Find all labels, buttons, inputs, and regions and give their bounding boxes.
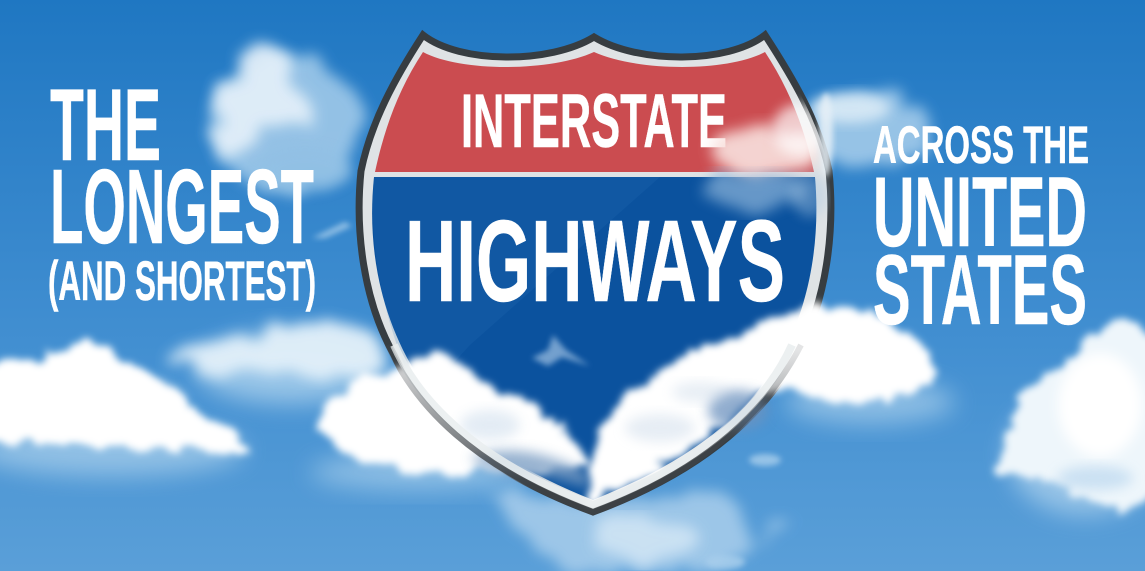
shield red top panel: [375, 52, 814, 172]
shield blue bottom panel: [372, 177, 816, 500]
title left: the longest (and shortest): THE: [50, 68, 161, 182]
shield outer border: [359, 35, 831, 512]
cloud: small wisp inside shield: [532, 335, 590, 366]
cloud: upper left behind text: [210, 46, 360, 238]
cloud: bottom centre: [490, 454, 800, 571]
cloud: over shield upper right: [703, 93, 833, 217]
title right: across the united states: [873, 116, 1089, 345]
cloud: far right: [996, 322, 1145, 515]
interstate shield: [359, 35, 831, 512]
shield rim over clouds: [388, 345, 801, 512]
heading: highways: HIGHWAYS: [405, 196, 785, 326]
shield light reflection: [373, 177, 660, 400]
cloud: foreground right of shield: [583, 304, 955, 505]
title left: the longest (and shortest): (AND SHORTEST): [48, 249, 316, 312]
cloud: foreground left of shield: [310, 345, 592, 490]
cloud: lower left: [0, 338, 252, 476]
title left: the longest (and shortest): LONGEST: [50, 148, 314, 266]
cloud: centre left: [170, 317, 385, 404]
cloud: upper right behind shield: [810, 90, 930, 166]
heading: interstate: INTERSTATE: [461, 79, 727, 164]
title left: the longest (and shortest): [48, 68, 316, 312]
